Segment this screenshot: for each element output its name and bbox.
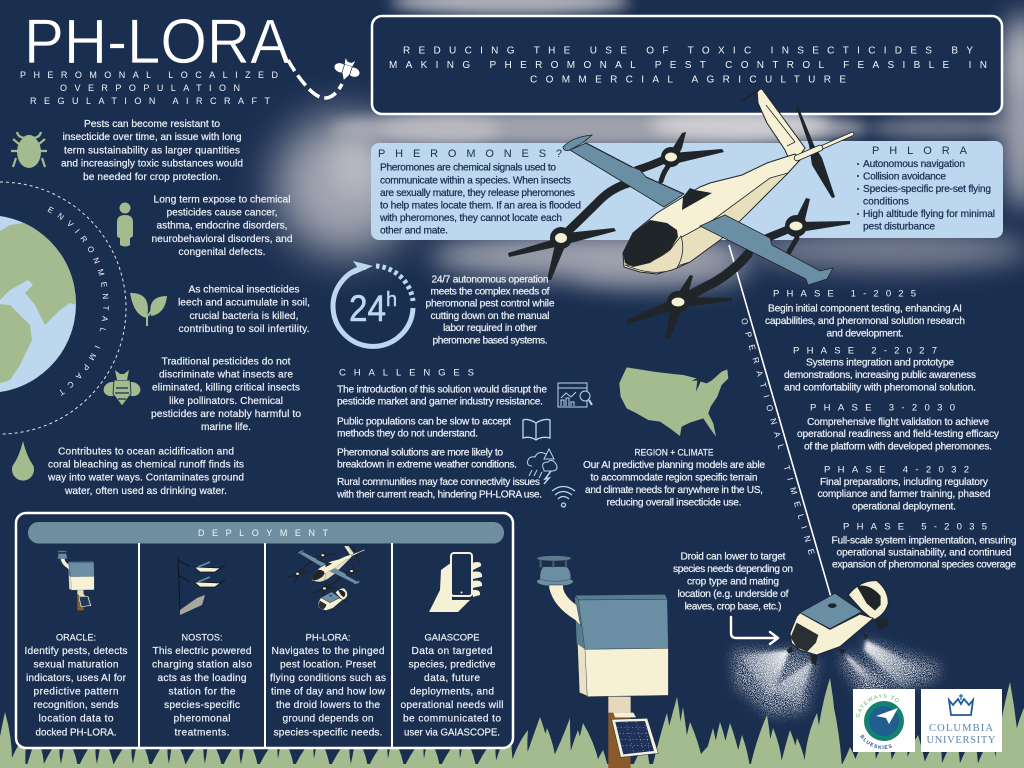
phase 3 [797,402,1000,452]
text: nostos: species-specific [164,700,240,711]
phase 1: and development. [826,328,904,340]
panel: phlora: conditions [863,196,909,208]
text block: ocean: Contributes to ocean acidification and [58,446,234,458]
phase 1: capabilities, and pheromonal solution research [765,316,965,327]
aircraft [508,89,852,340]
arrow [731,617,778,644]
text block: ocean: way into water ways. Contaminates ground [47,472,244,484]
text: gaiascope: be communicated to [403,714,501,724]
text block: health [152,194,293,258]
text block: autonomous operation: cutting down on the manual [430,311,550,322]
phase 4: PHASE 4-2032 [824,464,969,476]
text: ph-lora: ground depends on [282,714,374,724]
phase 5 [832,522,1017,570]
text block: autonomous operation [426,274,555,346]
panel: phlora [790,141,1003,238]
panel: phlora: pest disturbance [863,222,935,232]
text: gaiascope: user via GAIASCOPE. [404,728,500,738]
arc label: environmental impact: ENVIRONMENTAL IMPACT [48,206,109,396]
icon: white bee [331,56,363,84]
challenges: pesticide market and garner industry resistance. [337,396,543,408]
title: PH-LORA [24,7,290,77]
dashed flight path [288,60,342,98]
text: oracle: sexual maturation [34,660,118,670]
headline box [372,16,1002,114]
text block: soil: As chemical insecticides [188,284,300,296]
panel: phlora: High altitude flying for minimal [863,209,995,220]
text block: resistance [61,119,243,183]
challenges: Rural communities may face connectivity issues [337,477,540,488]
icon: book [523,419,550,440]
panel: phlora: PHLORA [872,145,968,157]
phase 5: Full-scale system implementation, ensuring [832,536,1017,546]
text block: health: asthma, endocrine disorders, [156,220,288,232]
icon: storm [528,449,557,484]
deployment header: DEPLOYMENT [198,528,328,538]
text: oracle: predictive pattern [34,686,118,698]
icon: person [117,202,133,246]
text: gaiascope: operational needs will [400,700,504,711]
text block: resistance: and increasingly toxic substances would [61,158,243,170]
text: oracle: ORACLE: [56,632,96,642]
phase 4 [818,464,991,512]
text: gaiascope [400,632,504,738]
text: oracle: location data to [38,714,114,724]
text block: droid note: crop type and mating [687,576,779,588]
challenges: CHALLENGES [339,368,474,378]
text block: region and climate: to accommodate region specific terrain [590,472,758,484]
text block: autonomous operation: 24/7 autonomous operation [432,274,548,286]
text block: health: Long term expose to chemical [154,194,290,206]
text: ph-lora: Navigates to the pinged [272,646,385,657]
icon: water drop [12,441,34,481]
text: nostos: This electric powered [152,646,252,657]
icon: mini nostos [178,557,225,615]
panel: pheromones: PHEROMONES? [378,148,562,160]
panel: pheromones: communicate within a species. When insects [380,176,571,186]
icon: mini oracle [57,551,94,610]
text: oracle: indicators, uses AI for [26,673,127,684]
text block: ocean [47,446,244,497]
phase 3: operational readiness and field-testing efficacy [797,429,1000,440]
logo: gateways to blueskies: GATEWAYS TO [856,694,899,718]
text: oracle: docked PH-LORA. [36,728,116,738]
text: nostos: station for the [168,686,236,698]
challenges: The introduction of this solution would disrupt the [337,384,547,396]
text: nostos: pheromonal [174,714,230,724]
text block: droid note: species needs depending on [673,564,793,575]
icon: bee [102,370,142,406]
panel: pheromones: other and mate. [380,226,448,236]
subtitle: OVERPOPULATION [60,83,240,93]
dashed arc [0,182,126,434]
icon: market chart [558,383,592,407]
text block: pollinators [151,356,301,433]
text block: soil [178,284,310,335]
text block: health: congenital defects. [178,247,266,258]
challenges: breakdown in extreme weather conditions. [337,460,517,470]
panel: phlora: Autonomous navigation [863,159,965,170]
deployment header [28,522,504,544]
text block: soil: contributing to soil infertility. [178,324,310,335]
text: ph-lora: species-specific needs. [274,728,382,738]
text block: droid note: location (e.g. underside of [678,589,789,600]
text: oracle: recognition, sends [34,700,118,711]
text: ph-lora: the droid lowers to the [276,700,380,711]
headline box: MAKING PHEROMONAL PEST CONTROL FEASIBLE IN [389,60,987,71]
text: nostos [152,632,252,738]
icon: 24 hour clock: h [386,289,397,311]
clouds [275,0,1024,288]
map: United States [619,367,728,437]
phase 2: demonstrations, increasing public awareness [784,370,976,381]
text block: region and climate: and climate needs for anywhere in the US, [585,485,763,496]
text block: resistance: insecticide over time, an issue with long [62,132,242,143]
panel: deployment [16,513,513,748]
subtitle [20,70,279,106]
phase 5: expansion of pheromonal species coverage [832,560,1016,570]
subtitle: PHEROMONAL LOCALIZED [20,70,279,80]
text block: autonomous operation: pheromonal pest control while [426,298,555,310]
text block: region and climate [583,448,765,508]
droid [787,581,888,665]
challenges [336,368,547,500]
text block: pollinators: eliminated, killing critical insects [152,382,300,394]
text: nostos: charging station also [152,660,252,670]
text block: soil: crucial bacteria is killed, [190,311,298,322]
text block: pollinators: pesticides are notably harmful to [151,409,301,420]
logo: columbia university: COLUMBIA [929,723,993,734]
panel: pheromones: are sexually mature, they release pheromones [380,188,575,199]
text block: region and climate: Our AI predictive planning models are able [583,460,765,471]
phase 5: operational sustainability, and continued [836,548,1012,558]
panel: pheromones: to help mates locate them. If an area is flooded [380,200,581,212]
globe [0,215,76,393]
text: gaiascope: data, future [424,673,480,684]
challenges: Pheromonal solutions are more likely to [337,448,503,458]
text block: ocean: water, often used as drinking water. [64,486,227,497]
phase 2: Systems integration and prototype [806,358,954,368]
subtitle: REGULATION AIRCRAFT [30,96,270,106]
text: gaiascope: GAIASCOPE [424,632,480,642]
text block: region and climate: reducing overall insecticide use. [606,498,742,508]
text: gaiascope: Data on targeted [412,646,493,657]
panel: pheromones [371,143,801,240]
panel: pheromones: with pheromones, they cannot locate each [379,213,562,224]
phase 1: Begin initial component testing, enhancing AI [768,304,962,314]
text block: pollinators: marine life. [201,422,251,433]
headline box: REDUCING THE USE OF TOXIC INSECTICIDES BY [403,46,973,56]
oracle station [537,556,668,768]
text block: ocean: coral bleaching as chemical runoff finds its [48,460,244,470]
text block: resistance: Pests can become resistant to [84,119,220,130]
timeline line [729,245,833,604]
headline box: COMMERCIAL AGRICULTURE [530,74,846,86]
phase 4: compliance and farmer training, phased [818,489,991,500]
text: ph-lora: flying conditions such as [270,673,386,684]
phase 1: PHASE 1-2025 [773,288,916,300]
text block: region and climate: REGION + CLIMATE [634,448,714,458]
text block: resistance: term sustainability as larger quantities [64,146,240,156]
phase 2 [784,346,976,394]
text block: resistance: be needed for crop protection. [83,172,221,183]
phase 4: operational deployment. [852,502,956,512]
text block: soil: leech and accumulate in soil, [178,298,310,308]
phase 3: PHASE 3-2030 [810,402,955,414]
phase 5: PHASE 5-2035 [843,522,987,532]
text block: health: neurobehavioral disorders, and [152,234,293,245]
text block: pollinators: like pollinators. Chemical [169,396,283,407]
text block: pollinators: discriminate what insects are [159,370,293,380]
icon: 24 hour clock [333,261,413,346]
spray [733,640,940,715]
phase 2: and comfortability with pheromonal solution. [784,382,976,394]
text: oracle [24,632,128,738]
text: gaiascope: species, predictive [408,660,496,670]
phase 3: Comprehensive flight validation to achieve [807,417,989,428]
text block: health: pesticides cause cancer, [166,208,278,218]
text: ph-lora: time of day and how low [271,686,386,698]
text: oracle: Identify pests, detects [24,646,128,657]
text: gaiascope: deployments, and [410,686,494,698]
text block: droid note [673,552,793,612]
icon: 24 hour clock: 24 [349,288,386,329]
phase 1 [765,288,965,340]
text: nostos: acts as the loading [158,673,247,684]
icon: mini droid [317,588,347,613]
text: ph-lora: PH-LORA: [306,632,350,642]
logo: columbia university: UNIVERSITY [926,735,996,746]
challenges: with their current reach, hindering PH-LORA use. [336,490,542,500]
phase 2: PHASE 2-2027 [793,346,937,356]
text: nostos: NOSTOS: [182,632,222,642]
icon: plant [130,293,167,326]
text block: autonomous operation: labor required in other [443,323,538,334]
text: ph-lora [270,632,386,738]
challenges: methods they do not understand. [337,428,478,440]
text block: droid note: leaves, crop base, etc.) [684,602,782,612]
text block: autonomous operation: pheromone based systems. [432,336,548,346]
phase 3: of the platform with developed pheromones. [804,442,992,452]
text block: pollinators: Traditional pesticides do not [162,356,291,368]
logo: columbia university [921,689,1002,752]
grass [0,678,1024,768]
panel: phlora: Collision avoidance [863,172,946,182]
icon: mini aircraft [286,546,365,597]
text: nostos: treatments. [174,728,230,738]
timeline label: OPERATIONAL TIMELINE [739,317,817,556]
icon: hand with phone [429,553,482,612]
text block: droid note: Droid can lower to target [680,552,786,562]
challenges: Public populations can be slow to accept [337,416,511,428]
icon: beetle [11,132,47,168]
icon: wifi [552,486,575,507]
text: ph-lora: pest location. Preset [280,660,376,670]
panel: phlora: Species-specific pre-set flying [863,184,991,195]
logo: gateways to blueskies: BLUESKIES [860,734,892,749]
panel: pheromones: Pheromones are chemical signals used to [380,162,556,174]
logo: gateways to blueskies [853,689,915,752]
text block: autonomous operation: meets the complex needs of [430,286,550,298]
phase 4: Final preparations, including regulatory [820,477,989,488]
